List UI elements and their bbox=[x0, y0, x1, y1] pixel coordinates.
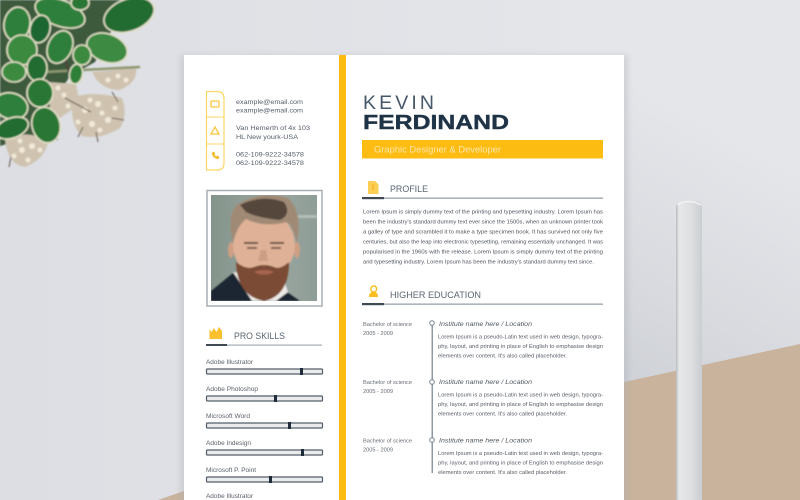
higher education heading: HIGHER EDUCATION bbox=[390, 290, 481, 301]
skill: Adobe Photoshop bbox=[206, 387, 322, 402]
education entry 2: Institute name here / Location bbox=[439, 379, 532, 386]
yellow divider bar bbox=[339, 55, 346, 500]
pro skills heading bbox=[206, 327, 322, 346]
education entry 1 bbox=[363, 321, 603, 360]
skill: Microsoft P. Point: Microsoft P. Point bbox=[206, 468, 256, 474]
skill: Adobe Illustrator: Adobe Illustrator bbox=[206, 360, 253, 366]
icon: location bbox=[211, 127, 219, 134]
plant decoration bbox=[0, 0, 159, 167]
contact text: HL New yourk-USA bbox=[236, 134, 299, 141]
icon: graduate bbox=[369, 286, 378, 297]
skill: Microsoft P. Point bbox=[206, 468, 322, 483]
name heading: KEVIN bbox=[363, 92, 434, 114]
skill: Adobe Illustrator 2: Adobe Illustrator bbox=[206, 494, 253, 500]
name heading bbox=[363, 92, 509, 134]
profile paragraph: a galley of type and scrambled it to make a type specimen book. It has survived not only five bbox=[363, 230, 603, 236]
leaves bbox=[0, 0, 159, 146]
skill: Microsoft Word: Microsoft Word bbox=[206, 414, 250, 420]
education entry 3: phy, layout, and printing in place of English to emphasise design bbox=[438, 460, 603, 466]
education entry 1: phy, layout, and printing in place of English to emphasise design bbox=[438, 344, 603, 350]
icon: document bbox=[368, 181, 378, 194]
education entry 3 bbox=[363, 438, 603, 476]
higher education heading bbox=[362, 286, 603, 305]
contact text bbox=[236, 99, 310, 167]
education entry 1: Bachelor of science bbox=[363, 322, 412, 328]
profile paragraph: centuries, but also the leap into electronic typesetting, remaining essentially unchanged. It was bbox=[363, 240, 603, 246]
education entry 3: Institute name here / Location bbox=[439, 438, 532, 444]
education entry 2: phy, layout, and printing in place of English to emphasise design bbox=[438, 402, 603, 408]
job title band: Graphic Designer & Developer bbox=[374, 144, 501, 156]
profile paragraph: Lorem Ipsum is simply dummy text of the printing and typesetting industry. Lorem Ipsum has bbox=[363, 210, 603, 216]
profile paragraph: been the industry's standard dummy text ever since the 1500s, when an unknown printer took bbox=[363, 220, 603, 226]
skill: Adobe Photoshop: Adobe Photoshop bbox=[206, 387, 259, 393]
contact text: Van Hemerth of 4x 103 bbox=[236, 125, 310, 132]
education timeline bbox=[430, 321, 434, 473]
skill: Adobe Indesign: Adobe Indesign bbox=[206, 441, 251, 447]
profile heading bbox=[362, 181, 603, 199]
education entry 2: Bachelor of science bbox=[363, 380, 412, 386]
contact text: 062-109-9222-34578 bbox=[236, 160, 304, 167]
education entry 1: Institute name here / Location bbox=[439, 321, 532, 328]
icon: bar chart bbox=[210, 327, 222, 339]
education entry 1: elements over content. It's also called placeholder. bbox=[438, 354, 567, 360]
education entry 2: elements over content. It's also called placeholder. bbox=[438, 412, 567, 418]
contact text: 062-109-9222-34578 bbox=[236, 152, 304, 158]
education entry 3: elements over content. It's also called placeholder. bbox=[438, 470, 567, 476]
resume sheet bbox=[180, 55, 628, 500]
foliage backing bbox=[0, 0, 125, 146]
education entry 2: Lorem Ipsum is a pseudo-Latin text used in web design, typogra- bbox=[438, 392, 603, 398]
education entry 1: 2005 - 2009 bbox=[363, 331, 393, 337]
contact icon box bbox=[206, 92, 224, 170]
education entry 1: Lorem Ipsum is a pseudo-Latin text used in web design, typogra- bbox=[438, 334, 603, 340]
profile paragraph: popularised in the 1960s with the release. Lorem Ipsum is simply dummy text of the printing bbox=[363, 250, 603, 256]
education entry 2 bbox=[363, 379, 603, 418]
skill: Adobe Illustrator bbox=[206, 360, 322, 375]
education entry 3: Lorem Ipsum is a pseudo-Latin text used in web design, typogra- bbox=[438, 451, 603, 457]
glass rod bbox=[676, 200, 702, 500]
pro skills heading: PRO SKILLS bbox=[234, 331, 285, 342]
kraft paper surface bbox=[158, 344, 800, 500]
name heading: FERDINAND bbox=[363, 112, 509, 134]
education entry 3: Bachelor of science bbox=[363, 438, 412, 444]
education entry 3: 2005 - 2009 bbox=[363, 448, 393, 454]
profile paragraph bbox=[363, 210, 603, 266]
icon: phone bbox=[212, 152, 219, 159]
profile heading: PROFILE bbox=[390, 184, 428, 195]
skill: Adobe Indesign bbox=[206, 441, 322, 456]
icon: mail bbox=[211, 101, 219, 107]
job title band bbox=[362, 140, 603, 158]
profile photo bbox=[207, 190, 322, 306]
skill: Microsoft Word bbox=[206, 414, 322, 429]
profile paragraph: and typesetting industry. Lorem Ipsum has been the industry's standard dummy text since. bbox=[363, 260, 594, 266]
contact text: example@email.com bbox=[236, 108, 304, 114]
contact text: example@email.com bbox=[236, 99, 304, 106]
flower clusters bbox=[5, 68, 136, 167]
education entry 2: 2005 - 2009 bbox=[363, 389, 393, 395]
